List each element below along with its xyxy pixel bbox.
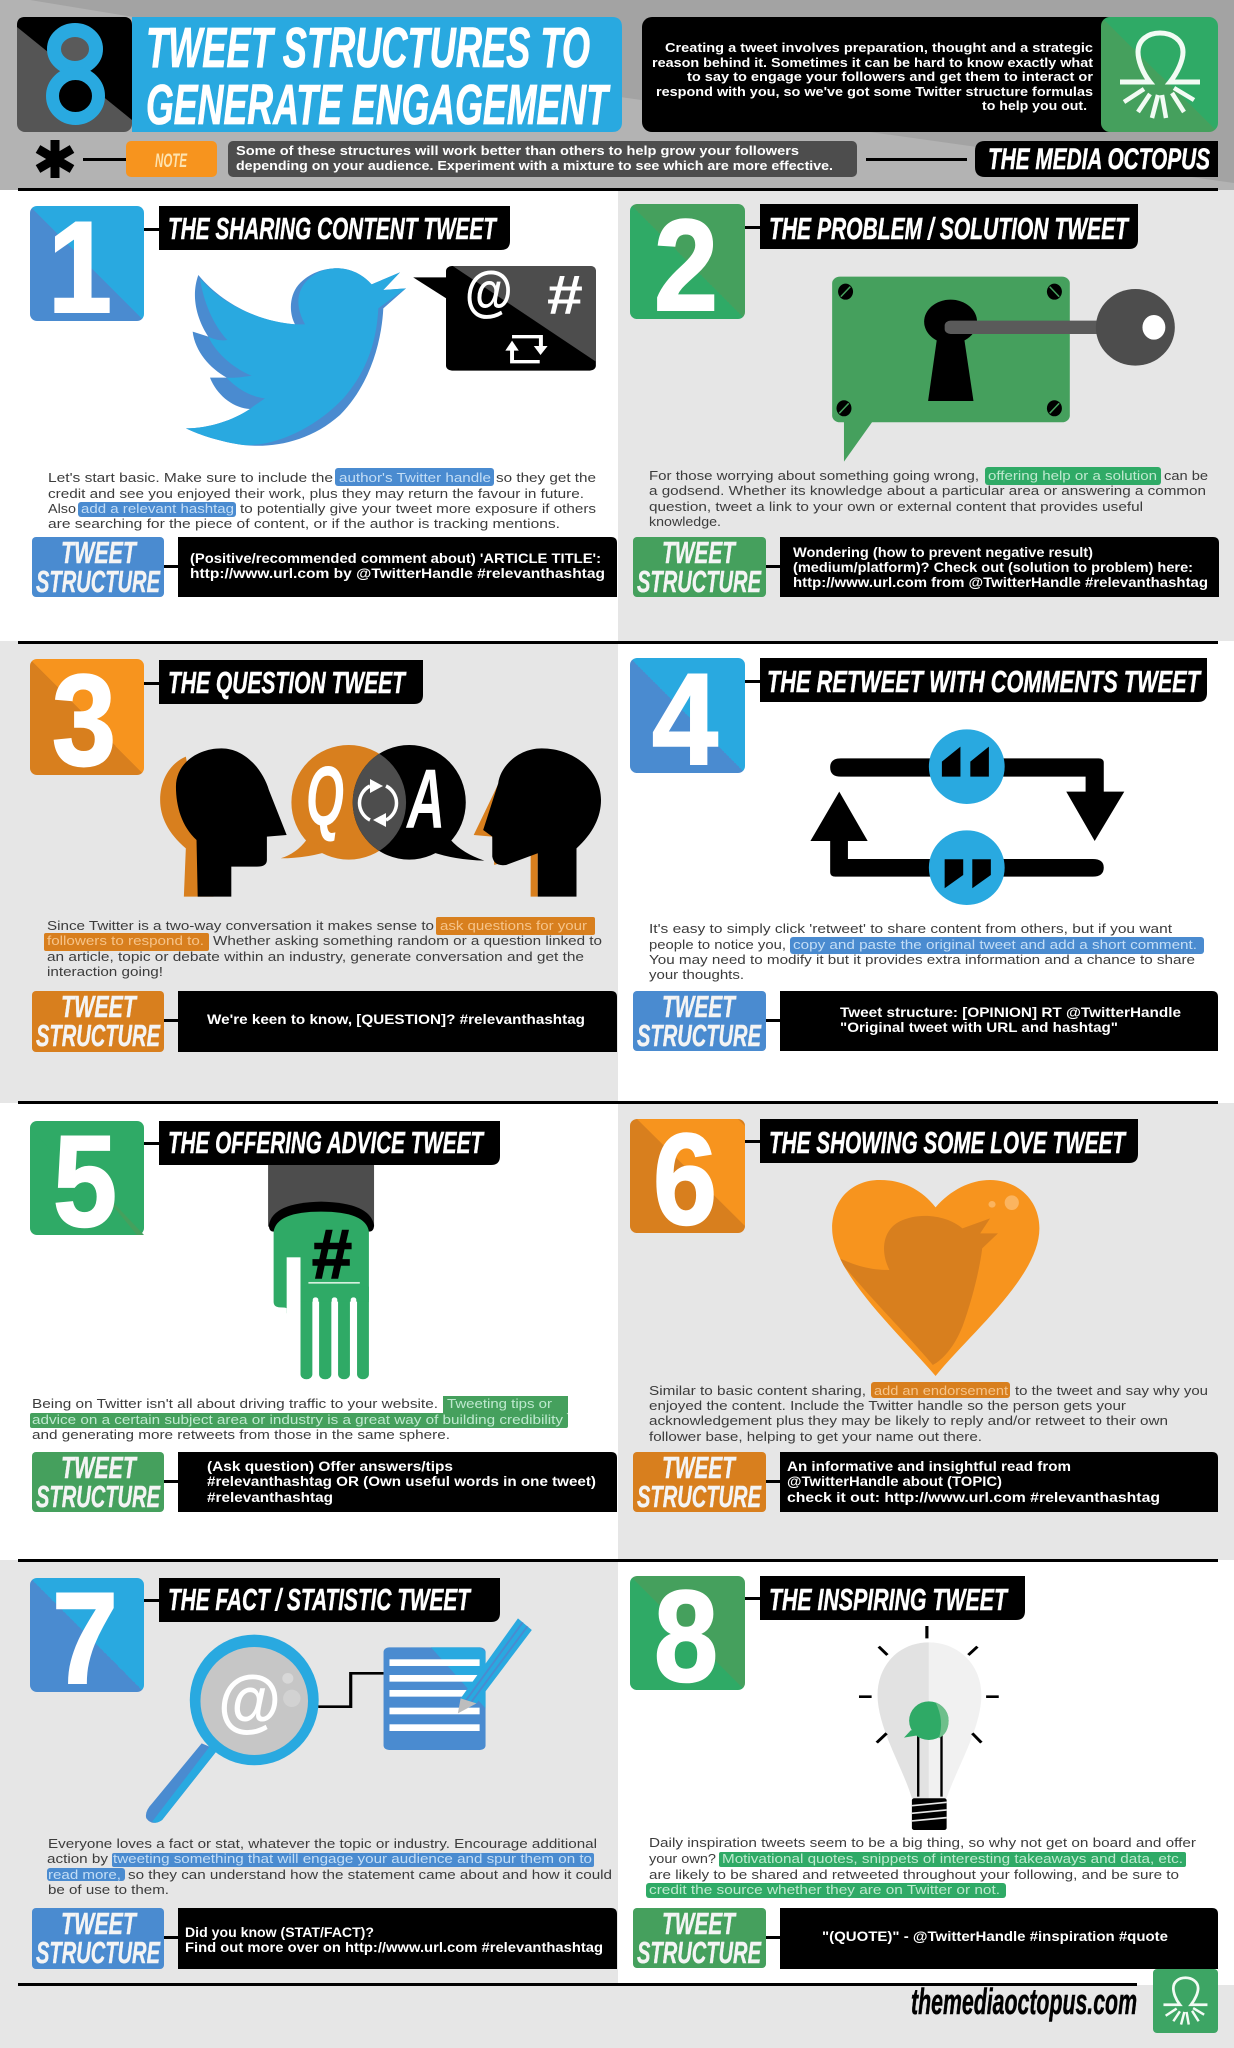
heading 8 (760, 1576, 1025, 1620)
number 3: 3 (52, 647, 116, 793)
heading 1: THE SHARING CONTENT TWEET (168, 211, 498, 246)
text block 5 (30, 1396, 568, 1442)
tweet structure 7: Did you know (STAT/FACT)? (185, 1925, 374, 1940)
text block 3: Since Twitter is a two-way conversation it makes sense to (47, 918, 434, 933)
tweet structure 5: #relevanthashtag OR (Own useful words in one tweet) (207, 1474, 596, 1489)
text block 2: offering help or a solution (988, 468, 1157, 483)
intro text block: to say to engage your followers and get them to interact or (687, 69, 1093, 84)
tweet structure 4: Tweet structure: [OPINION] RT @TwitterHandle (840, 1005, 1182, 1020)
text block 2: can be (1164, 468, 1208, 483)
number 2 (630, 192, 745, 338)
number 4: 4 (652, 646, 718, 792)
tweet structure 7: Find out more over on http://www.url.com #relevanthashtag (185, 1940, 603, 1955)
text block 4: people to notice you, (649, 937, 786, 952)
heading 8: THE INSPIRING TWEET (769, 1582, 1009, 1617)
tweet structure 6: STRUCTURE (637, 1479, 762, 1514)
text block 7: so they can understand how the statement came about and how it could (128, 1867, 612, 1882)
tweet structure 2: Wondering (how to prevent negative result) (793, 545, 1093, 560)
tweet structure 6: TWEET (662, 1450, 737, 1485)
speech bubble: mention hashtag retweet: @ (464, 260, 512, 323)
panel: 6 showing some love (618, 1103, 1234, 1560)
speech bubble: mention hashtag retweet: # (546, 263, 583, 326)
number 8: 8 (654, 1563, 718, 1709)
text block 4: You may need to modify it but it provides extra information and a chance to share (649, 952, 1195, 967)
tweet structure 4: STRUCTURE (637, 1018, 762, 1053)
text block 6: to the tweet and say why you (1015, 1383, 1208, 1398)
icon: hand with hashtag (268, 1165, 374, 1379)
text block 6 (649, 1382, 1208, 1444)
text block 8: Motivational quotes, snippets of interesting takeaways and data, etc. (722, 1851, 1183, 1866)
icon: magnifying glass and notepad (146, 1618, 532, 1823)
number 7 (30, 1565, 144, 1711)
number 2: 2 (654, 192, 718, 338)
panel: 5 offering advice (0, 1103, 618, 1560)
text block 4: your thoughts. (649, 967, 744, 982)
heading 5: THE OFFERING ADVICE TWEET (168, 1125, 485, 1160)
icon: heads with q and a bubbles (160, 745, 601, 897)
tweet structure 5: STRUCTURE (36, 1479, 161, 1514)
tweet structure 2: STRUCTURE (637, 564, 762, 599)
tweet structure 3 (32, 989, 617, 1053)
panel: 4 retweet with comments (618, 641, 1234, 1103)
tweet structure 6: check it out: http://www.url.com #relevanthashtag (787, 1490, 1160, 1505)
text block 5: Being on Twitter isn't all about driving traffic to your website. (32, 1396, 438, 1411)
icon: heart with bird (832, 1180, 1039, 1376)
note text (228, 141, 857, 177)
tweet structure 7 (32, 1906, 617, 1970)
text block 6: follower base, helping to get your name out there. (649, 1429, 982, 1444)
tweet structure 7: STRUCTURE (36, 1935, 161, 1970)
text block 1: credit and see you enjoyed their work, plus they may return the favour in future. (48, 486, 584, 501)
note text: depending on your audience. Experiment with a mixture to see which are more effective. (236, 158, 833, 173)
tweet structure 5 (32, 1450, 617, 1514)
tweet structure 4: TWEET (662, 989, 737, 1024)
text block 2 (649, 467, 1208, 529)
text block 7 (47, 1836, 612, 1897)
text block 6: enjoyed the content. Include the Twitter handle so the person gets your (649, 1398, 1127, 1413)
tweet structure 2 (633, 535, 1219, 599)
tweet structure 1: http://www.url.com by @TwitterHandle #relevanthashtag (190, 566, 605, 581)
text block 8: credit the source whether they are on Twitter or not. (649, 1882, 1000, 1897)
icon: octopus logo (1101, 17, 1218, 132)
icon: twitter bird (186, 268, 406, 446)
text block 1 (48, 468, 596, 531)
main title (132, 16, 622, 137)
number 7: 7 (52, 1565, 118, 1711)
text block 8 (646, 1835, 1197, 1898)
text block 6: add an endorsement (874, 1383, 1009, 1398)
tweet structure 1: TWEET (61, 535, 138, 570)
tweet structure 2: (medium/platform)? Check out (solution to problem) here: (793, 560, 1193, 575)
number 5: 5 (53, 1108, 117, 1254)
tweet structure 1 (32, 535, 617, 599)
heading 5 (159, 1121, 500, 1165)
text block 2: For those worrying about something going wrong, (649, 468, 979, 483)
text block 2: question, tweet a link to your own or external content that provides useful (649, 499, 1143, 514)
speech bubble: mention hashtag retweet (413, 260, 596, 371)
text block 3: followers to respond to. (47, 933, 204, 948)
number 4 (630, 646, 745, 792)
text block 1: Let's start basic. Make sure to include the (48, 470, 333, 485)
text block 4 (649, 921, 1204, 982)
panel: 3 question (0, 641, 618, 1103)
text block 3: Whether asking something random or a question linked to (213, 933, 602, 948)
note badge: NOTE (155, 151, 188, 172)
text block 1: to potentially give your tweet more exposure if others (240, 501, 596, 516)
heading 3: THE QUESTION TWEET (168, 665, 407, 700)
tweet structure 3: We're keen to know, [QUESTION]? #relevanthashtag (207, 1012, 585, 1027)
heading 6 (760, 1119, 1138, 1163)
icon: magnifying glass and notepad: @ (217, 1662, 280, 1740)
text block 1: author's Twitter handle (339, 470, 491, 485)
text block 2: knowledge. (649, 514, 721, 529)
tweet structure 6 (633, 1450, 1218, 1514)
panel: 1 sharing content (0, 190, 618, 641)
tweet structure 8: TWEET (662, 1906, 737, 1941)
tweet structure 2: TWEET (662, 535, 737, 570)
text block 7: read more, (48, 1867, 121, 1882)
text block 3: an article, topic or debate within an industry, generate conversation and get the (47, 949, 584, 964)
header number eight (17, 17, 132, 132)
text block 7: tweeting something that will engage your audience and spur them on to (113, 1851, 592, 1866)
intro text block: reason behind it. Sometimes it can be hard to know exactly what (652, 55, 1094, 70)
text block 1: Also (48, 501, 76, 516)
number 1: 1 (48, 194, 112, 340)
text block 7: action by (47, 1851, 109, 1866)
text block 1: add a relevant hashtag (81, 501, 234, 516)
panel: 8 inspiring (618, 1560, 1234, 2048)
header (0, 0, 1234, 190)
intro text block: Creating a tweet involves preparation, thought and a strategic (665, 40, 1093, 55)
tweet structure 8 (633, 1906, 1218, 1970)
panel: 7 fact statistic (0, 1560, 618, 2048)
icon: heads with q and a bubbles: Q (306, 749, 344, 843)
heading 3 (159, 660, 423, 704)
number 6: 6 (653, 1106, 717, 1252)
text block 1: so they get the (496, 470, 596, 485)
number 5 (30, 1108, 144, 1254)
icon: footer octopus logo (1153, 1969, 1218, 2033)
heading 1 (159, 206, 510, 250)
icon: hand with hashtag: # (312, 1215, 352, 1293)
text block 3 (44, 917, 602, 979)
tweet structure 6: @TwitterHandle about (TOPIC) (787, 1474, 1002, 1489)
text block 3: interaction going! (47, 964, 163, 979)
tweet structure 1: (Positive/recommended comment about) 'ARTICLE TITLE': (190, 551, 601, 566)
text block 6: Similar to basic content sharing, (649, 1383, 866, 1398)
text block 4: It's easy to simply click 'retweet' to share content from others, but if you want (649, 921, 1173, 936)
panel: 2 problem solution (618, 190, 1234, 641)
tweet structure 5: TWEET (61, 1450, 138, 1485)
icon: retweet arrows with quote marks (810, 729, 1124, 905)
icon: light bulb with speech bubble (859, 1626, 999, 1830)
main title: GENERATE ENGAGEMENT (146, 73, 611, 137)
note text: Some of these structures will work better than others to help grow your followers (236, 143, 799, 158)
text block 5: advice on a certain subject area or industry is a great way of building credibility (32, 1412, 564, 1427)
tweet structure 5: #relevanthashtag (207, 1490, 333, 1505)
text block 5: and generating more retweets from those in the same sphere. (32, 1427, 450, 1442)
note badge (126, 141, 217, 177)
tweet structure 4: "Original tweet with URL and hashtag" (840, 1020, 1118, 1035)
intro text block (642, 17, 1122, 132)
number 6 (630, 1106, 745, 1252)
text block 8: your own? (649, 1851, 716, 1866)
text block 5: Tweeting tips or (447, 1396, 553, 1411)
tweet structure 5: (Ask question) Offer answers/tips (207, 1459, 453, 1474)
tweet structure 3: TWEET (61, 989, 138, 1024)
text block 3: ask questions for your (440, 918, 588, 933)
tweet structure 4 (633, 989, 1218, 1053)
number 8 (630, 1563, 745, 1709)
heading 7: THE FACT / STATISTIC TWEET (168, 1582, 472, 1617)
tweet structure 8: "(QUOTE)" - @TwitterHandle #inspiration #quote (822, 1929, 1169, 1944)
number 1 (30, 194, 144, 340)
tweet structure 8: STRUCTURE (637, 1935, 762, 1970)
text block 2: a godsend. Whether its knowledge about a particular area or answering a common (649, 483, 1206, 498)
main title: TWEET STRUCTURES TO (146, 16, 590, 80)
heading 2 (760, 204, 1138, 249)
text block 7: be of use to them. (48, 1882, 169, 1897)
heading 7 (159, 1578, 500, 1622)
tweet structure 7: TWEET (61, 1906, 138, 1941)
intro text block: respond with you, so we've got some Twitter structure formulas (656, 84, 1093, 99)
text block 8: are likely to be shared and retweeted throughout your following, and be sure to (649, 1867, 1179, 1882)
tweet structure 1: STRUCTURE (36, 564, 161, 599)
icon: keyhole plate and key (832, 277, 1175, 462)
intro text block: to help you out. (982, 98, 1087, 113)
text block 4: copy and paste the original tweet and add a short comment. (793, 937, 1197, 952)
tweet structure 6: An informative and insightful read from (787, 1459, 1071, 1474)
icon: heads with q and a bubbles: A (406, 752, 445, 846)
icon: asterisk (38, 140, 126, 178)
tweet structure 2: http://www.url.com from @TwitterHandle #relevanthashtag (793, 575, 1208, 590)
tweet structure 3: STRUCTURE (36, 1018, 161, 1053)
text block 8: Daily inspiration tweets seem to be a big thing, so why not get on board and offer (649, 1835, 1197, 1850)
number 3 (30, 647, 144, 793)
text block 1: are searching for the piece of content, or if the author is tracking mentions. (48, 516, 560, 531)
text block 6: acknowledgement plus they may be likely to reply and/or retweet to their own (649, 1413, 1168, 1428)
text block 7: Everyone loves a fact or stat, whatever the topic or industry. Encourage additional (48, 1836, 597, 1851)
